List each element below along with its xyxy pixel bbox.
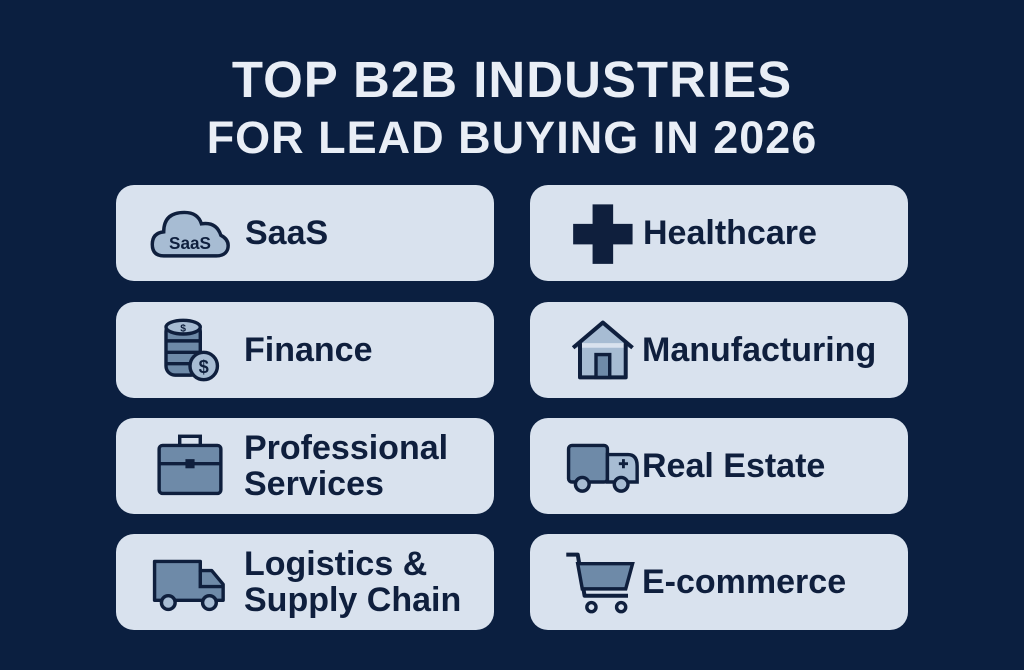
icon: cloud: SaaS [169,233,211,253]
label: E-commerce [642,563,846,601]
label [244,545,461,619]
label: Healthcare [643,214,817,252]
label: Real Estate [642,447,825,485]
icon: truck [566,444,639,493]
label: Supply Chain [244,581,461,619]
title: TOP B2B INDUSTRIES [232,51,792,108]
card: Finance [116,302,494,398]
card: E-commerce [530,534,908,630]
label: Logistics & [244,545,427,583]
subtitle: FOR LEAD BUYING IN 2026 [207,112,817,163]
icon: briefcase [157,434,223,496]
label: Manufacturing [642,331,876,369]
icon: cross [573,204,633,264]
icon: cloud [150,210,230,258]
icon: coins: $ [199,356,209,377]
label: SaaS [245,214,328,252]
card: Healthcare [530,185,908,281]
label: Professional [244,429,448,467]
label [244,429,448,503]
label: Finance [244,331,372,369]
card: SaaS [116,185,494,281]
icon: van [152,560,225,612]
card: Logistics [116,534,494,630]
label: Services [244,465,384,503]
card: Real Estate [530,418,908,514]
icon: cart [566,552,635,614]
icon: house [572,320,634,380]
icon: coins: $ [180,324,186,335]
card: Professional Services [116,418,494,514]
icon: coins [164,318,220,382]
card: Manufacturing [530,302,908,398]
